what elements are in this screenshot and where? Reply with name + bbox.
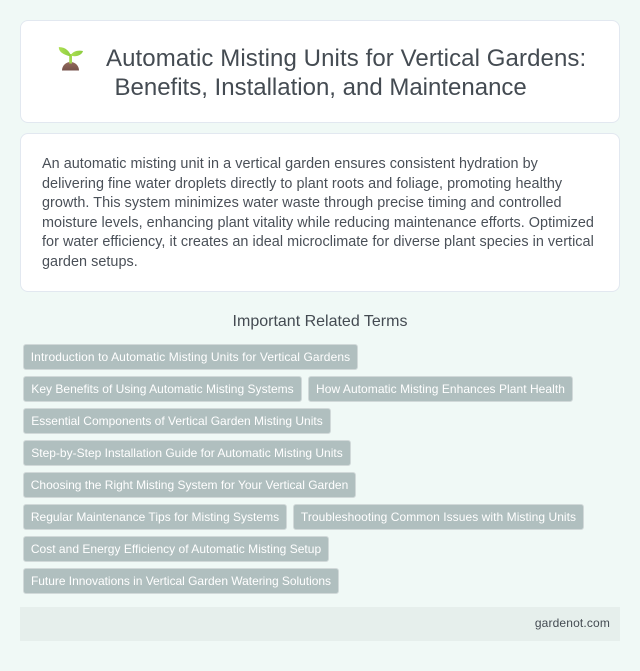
tag: How Automatic Misting Enhances Plant Health bbox=[316, 382, 565, 396]
heading: Automatic Misting Units for Vertical Gardens: bbox=[106, 45, 586, 72]
heading: important related terms: Important Related Terms bbox=[233, 313, 407, 330]
tag: Step-by-Step Installation Guide for Automatic Misting Units bbox=[31, 446, 343, 460]
tag bbox=[23, 472, 356, 498]
tag bbox=[308, 376, 573, 402]
tag bbox=[23, 504, 287, 530]
tag list bbox=[23, 344, 584, 594]
text block: description: for water efficiency, it creates an ideal microclimate for diverse plant species in vertical bbox=[42, 234, 594, 250]
text block: description bbox=[42, 156, 594, 270]
tag: Choosing the Right Misting System for Your Vertical Garden bbox=[31, 478, 348, 492]
tag: Cost and Energy Efficiency of Automatic Misting Setup bbox=[31, 542, 321, 556]
panel: title card bbox=[20, 20, 620, 123]
tag: Troubleshooting Common Issues with Misting Units bbox=[301, 510, 576, 524]
footer source text: gardenot.com bbox=[535, 616, 610, 630]
icon: seedling bbox=[58, 47, 83, 70]
heading bbox=[106, 45, 586, 101]
tag: Regular Maintenance Tips for Misting Systems bbox=[31, 510, 279, 524]
panel: description card bbox=[20, 133, 620, 292]
tag bbox=[23, 344, 358, 370]
tag bbox=[23, 536, 329, 562]
tag bbox=[293, 504, 584, 530]
text block: description: An automatic misting unit in a vertical garden ensures consistent hydration by bbox=[42, 156, 538, 172]
tag: Essential Components of Vertical Garden Misting Units bbox=[31, 414, 323, 428]
text block: description: moisture levels, enhancing plant vitality while reducing maintenance efforts. Optimized bbox=[42, 214, 594, 230]
tag: Future Innovations in Vertical Garden Watering Solutions bbox=[31, 574, 331, 588]
text block: description: garden setups. bbox=[42, 254, 138, 270]
heading: Benefits, Installation, and Maintenance bbox=[114, 74, 527, 101]
tag bbox=[23, 376, 302, 402]
text block: description: delivering fine water droplets directly to plant roots and foliage, promoting healthy bbox=[42, 176, 562, 192]
tag bbox=[23, 408, 331, 434]
footer bar bbox=[20, 607, 620, 641]
tag: Introduction to Automatic Misting Units for Vertical Gardens bbox=[31, 350, 350, 364]
tag bbox=[23, 568, 339, 594]
tag: Key Benefits of Using Automatic Misting Systems bbox=[31, 382, 294, 396]
tag bbox=[23, 440, 351, 466]
text block: description: growth. This system minimizes water waste through precise timing and controlled bbox=[42, 195, 562, 211]
